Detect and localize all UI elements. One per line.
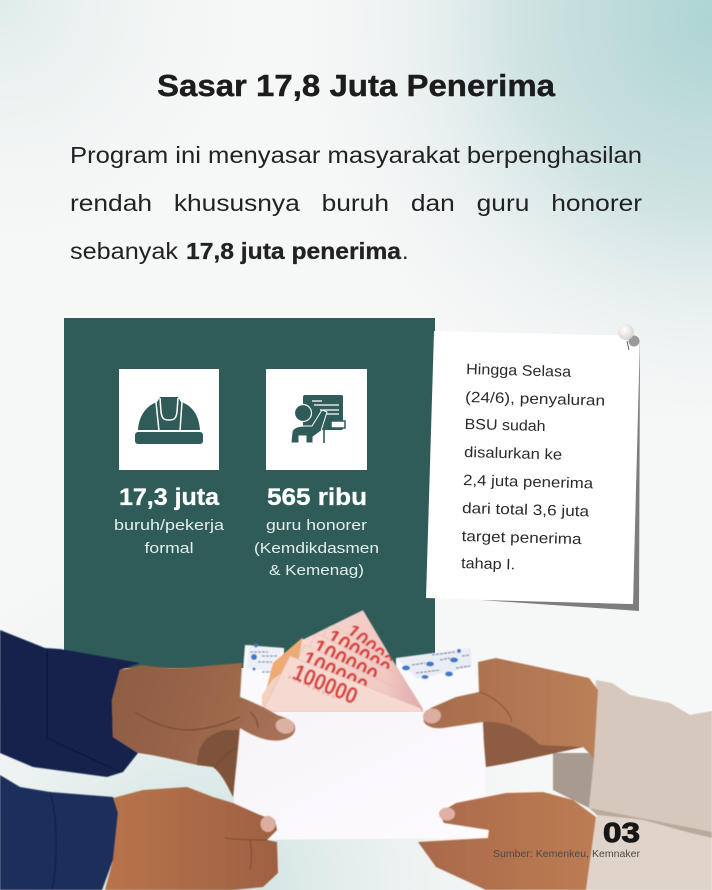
stat: workers: buruh/pekerja [114, 517, 225, 534]
sleeve: inner shadow part [553, 753, 596, 810]
stat: teachers [254, 484, 379, 579]
icon: pin [618, 324, 640, 350]
hand: bottom left [105, 787, 278, 890]
note 5 [299, 610, 399, 670]
intro text block: . [402, 238, 409, 264]
note text: tahap I. [461, 555, 515, 573]
note text: target penerima [461, 528, 583, 548]
hand: top right [423, 658, 598, 767]
envelope front [234, 712, 488, 840]
stat: teachers: guru honorer [266, 517, 367, 534]
hand: bottom right [418, 792, 596, 890]
note 5: 100000 [341, 619, 406, 682]
intro text block: rendah khususnya buruh dan guru honorer [70, 190, 642, 216]
intro text block: 17,8 juta penerima [186, 238, 402, 264]
intro text block [70, 142, 642, 264]
finger shadow [483, 722, 583, 767]
left hands and navy sleeves [0, 630, 296, 890]
icon: helmet [119, 369, 219, 470]
money: rupiah banknotes [262, 610, 423, 712]
note 2: 100000 [298, 645, 372, 700]
note 1 front: 0000000000 [288, 674, 336, 700]
icon: teacher at board [266, 369, 367, 470]
stat: workers: 17,3 juta [119, 484, 220, 511]
panel: statistics [64, 318, 435, 668]
note text: (24/6), penyaluran [465, 389, 605, 410]
intro text block: sebanyak [70, 238, 178, 264]
cuff [586, 815, 712, 890]
stat: teachers: 565 ribu [267, 484, 367, 511]
sleeve: right [589, 680, 712, 838]
thumbnail [274, 717, 296, 735]
note text: disalurkan ke [464, 444, 562, 464]
note 2 [298, 644, 376, 686]
note 4: 100000 [322, 624, 395, 683]
note 3: 100000 [308, 633, 382, 689]
title: Sasar 17,8 Juta Penerima [157, 68, 556, 103]
hand: top left [112, 663, 295, 797]
envelope security pattern [246, 644, 472, 679]
stat: workers: formal [144, 540, 194, 557]
note text: 2,4 juta penerima [463, 472, 594, 492]
source: Sumber: Kemenkeu, Kemnaker [493, 848, 640, 860]
stat: workers [114, 484, 225, 557]
note text: BSU sudah [464, 416, 546, 435]
note text: Hingga Selasa [466, 361, 572, 381]
page number: 03 [603, 817, 640, 848]
orange note edge [262, 638, 310, 712]
finger shadow [197, 730, 239, 797]
stat: teachers: (Kemdikdasmen [254, 540, 379, 557]
sleeve: bottom left [0, 775, 118, 890]
note 1 front [262, 656, 423, 712]
stat: teachers: & Kemenag) [269, 562, 364, 579]
note text: dari total 3,6 juta [462, 500, 590, 520]
note 1 front: 100000 [289, 659, 362, 709]
sleeve: top left [0, 630, 140, 777]
sticky note [426, 324, 640, 611]
right hands and beige sleeve [418, 658, 712, 890]
envelope back [238, 644, 479, 735]
note text [461, 361, 605, 573]
intro text block: Program ini menyasar masyarakat berpenghasilan [70, 142, 642, 168]
